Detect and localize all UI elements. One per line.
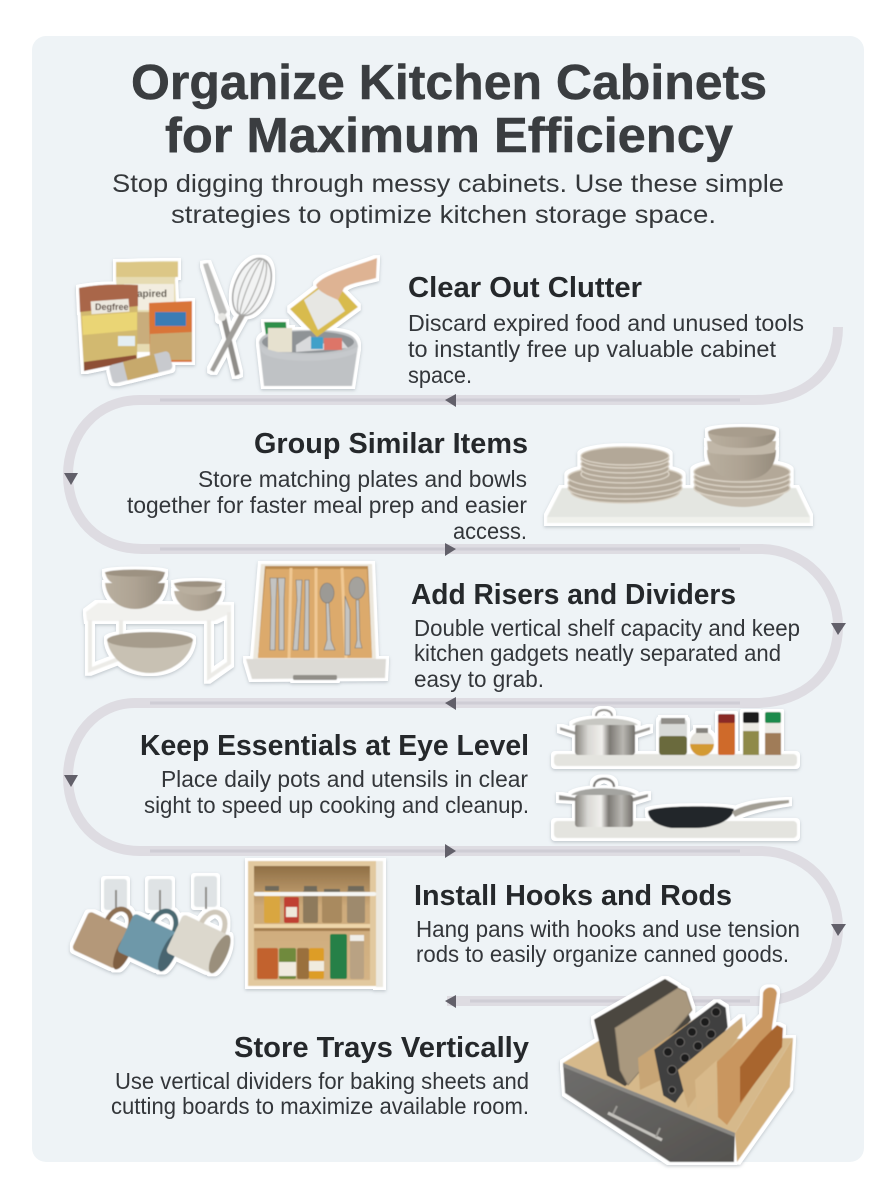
forks, knives and spoons	[270, 577, 365, 655]
illustration: food bags	[79, 261, 192, 384]
body text: Place daily pots and utensils in clear	[161, 766, 528, 792]
muffin tin	[655, 1003, 727, 1102]
heading: Clear Out Clutter	[408, 272, 642, 304]
cutting boards	[717, 987, 783, 1125]
body text: rods to easily organize canned goods.	[416, 941, 789, 967]
body text: Use vertical dividers for baking sheets and	[115, 1068, 529, 1094]
body text: Double vertical shelf capacity and keep	[414, 615, 800, 641]
step 2: group similar items	[127, 428, 528, 544]
jars on bottom shelf	[257, 934, 364, 979]
subtitle: strategies to optimize kitchen storage space.	[171, 201, 716, 229]
illustration: drawer with vertical trays and boards	[563, 980, 793, 1162]
upper bowls	[105, 583, 165, 609]
body text: to instantly free up valuable cabinet	[408, 336, 777, 362]
pot	[559, 794, 648, 802]
heading: Add Risers and Dividers	[411, 579, 736, 611]
step 5: install hooks and rods	[414, 880, 800, 967]
illustration: open cabinet with rod and jars	[248, 861, 383, 987]
spice jars	[659, 712, 781, 756]
step 6: store trays vertically	[111, 1032, 529, 1119]
heading: Keep Essentials at Eye Level	[140, 730, 529, 762]
brown mug	[72, 896, 146, 972]
illustration: trash bin with hand	[259, 258, 377, 386]
wood dividers	[678, 1017, 743, 1108]
heading: Group Similar Items	[254, 428, 528, 460]
white riser	[86, 603, 231, 677]
step 3: add risers and dividers	[411, 579, 800, 692]
stacked bowls and dishes	[694, 427, 790, 507]
subtitle	[112, 170, 784, 229]
jars on top shelf	[264, 886, 365, 923]
illustration: riser shelf with bowls	[86, 570, 231, 677]
shelf	[554, 821, 797, 838]
drawer front with handle	[563, 1063, 735, 1162]
shelf	[547, 488, 810, 523]
heading: Store Trays Vertically	[234, 1032, 529, 1064]
body text: Store matching plates and bowls	[198, 466, 527, 492]
arrowhead	[64, 394, 846, 1008]
adhesive hooks	[104, 876, 217, 910]
step 1: clear out clutter	[408, 272, 804, 388]
body text	[414, 615, 800, 692]
serpentine path connecting the steps	[64, 327, 846, 1008]
body text: space.	[408, 362, 472, 388]
tan baking sheet	[615, 988, 692, 1085]
frying pan	[648, 806, 734, 828]
body text: together for faster meal prep and easier	[127, 492, 527, 518]
title: for Maximum Efficiency	[165, 109, 733, 163]
body text	[408, 310, 804, 388]
illustration: mugs on hooks	[72, 876, 242, 976]
illustration: food bags: Degfree	[95, 302, 129, 312]
subtitle: Stop digging through messy cabinets. Use these simple	[112, 170, 784, 198]
pot	[560, 727, 650, 735]
illustration: food bags: apired	[137, 289, 167, 300]
illustration: upper shelf with pot and spices	[554, 710, 797, 766]
shelf	[554, 754, 797, 766]
title: Organize Kitchen Cabinets	[131, 56, 767, 110]
drawer interior	[563, 1038, 793, 1133]
wood divider	[638, 1015, 702, 1090]
body text	[111, 1068, 529, 1119]
body text	[416, 916, 800, 967]
tension rod	[254, 892, 376, 896]
illustration: plates and bowls on a shelf	[547, 427, 810, 523]
drawer front	[246, 659, 386, 679]
body text	[127, 466, 527, 544]
step 4: keep essentials at eye level	[140, 730, 529, 818]
body text: Hang pans with hooks and use tension	[416, 916, 800, 942]
illustration: lower shelf with pot and pan	[554, 779, 797, 838]
cream mug	[166, 899, 242, 976]
body text	[144, 766, 529, 818]
blue mug	[117, 898, 191, 974]
stacked plates	[568, 447, 682, 503]
illustration: kitchen tools	[203, 253, 279, 376]
dark baking sheet	[595, 980, 690, 1085]
title	[131, 56, 767, 163]
large lower bowl	[107, 640, 193, 673]
heading: Install Hooks and Rods	[414, 880, 732, 912]
body text: cutting boards to maximize available room.	[111, 1093, 529, 1119]
body text: kitchen gadgets neatly separated and	[414, 640, 781, 666]
body text: easy to grab.	[414, 666, 544, 692]
body text: access.	[453, 518, 527, 544]
drawer side	[735, 1038, 793, 1162]
illustration: cutlery drawer	[246, 564, 386, 680]
body text: sight to speed up cooking and cleanup.	[144, 792, 529, 818]
body text: Discard expired food and unused tools	[408, 310, 804, 336]
